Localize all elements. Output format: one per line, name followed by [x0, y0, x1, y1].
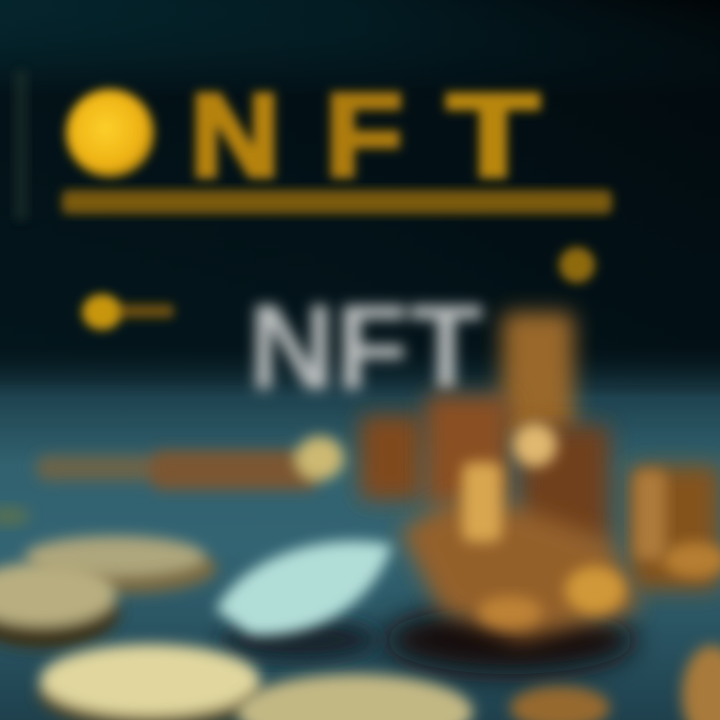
pile shadow [385, 606, 635, 674]
base of pile [400, 490, 640, 640]
coin stacks: golden pile on the right [360, 312, 720, 674]
heading underline: gold bar [62, 190, 612, 214]
coin: pale cream left top [25, 536, 217, 594]
left edge faint vertical strip [14, 70, 28, 220]
coin: cream bottom centre [237, 674, 473, 720]
coin: gold bottom right [682, 645, 720, 720]
right stacks [630, 465, 720, 590]
tall stack [502, 312, 574, 437]
heading: gold ONFT letters [66, 70, 539, 202]
small gold dot upper right [559, 247, 595, 283]
coin: gold bottom [510, 686, 610, 720]
heading: gold ONFT letters: T [447, 70, 539, 202]
small green mark left [0, 506, 30, 526]
coin: pale mint diamond [216, 541, 392, 635]
coin row: horizontal stack on left [36, 436, 344, 490]
text: white NFT: NFT [248, 279, 483, 415]
heading: gold ONFT letters: F [325, 70, 403, 202]
coin: cream far left [0, 562, 120, 648]
background: wall darkening [0, 0, 720, 385]
heading: gold ONFT letters: N [190, 70, 280, 202]
coin: large cream lower [38, 644, 262, 720]
small gold label left [82, 294, 174, 330]
coin shadow under mint coin [220, 620, 380, 660]
mid stacks [360, 415, 422, 500]
background: teal table surface [0, 345, 720, 720]
highlights [462, 462, 502, 542]
